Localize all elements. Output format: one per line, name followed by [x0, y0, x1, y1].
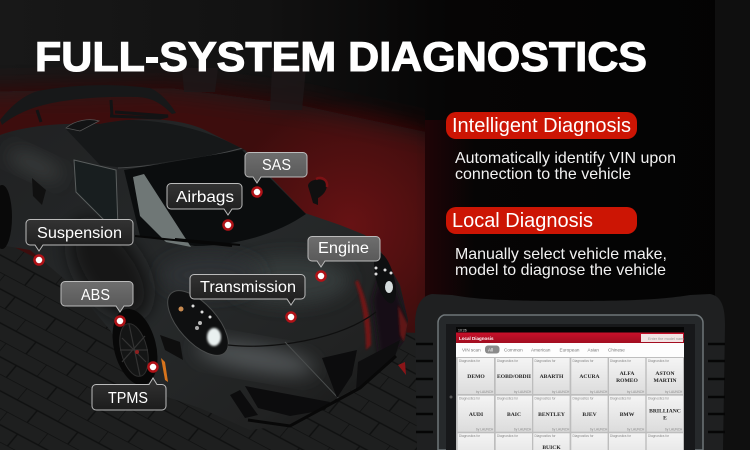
vehicle make grid: Diagnostics for: [459, 396, 481, 400]
vehicle make grid: Diagnostics for: [497, 434, 519, 438]
tablet rubber case: [415, 294, 725, 450]
windshield: [124, 150, 306, 246]
vehicle make grid: by LAUNCH: [590, 428, 608, 432]
tablet bezel: [438, 315, 703, 450]
vehicle make grid: Diagnostics for: [459, 359, 481, 363]
vehicle make grid: BAIC: [507, 412, 521, 418]
tablet screen: Common: [504, 348, 523, 352]
car: [0, 85, 408, 430]
vehicle make grid: Diagnostics for: [572, 396, 595, 400]
text: intelligent diagnosis description: connection to the vehicle: [455, 166, 631, 183]
rear spoiler: [0, 85, 176, 125]
title: FULL-SYSTEM DIAGNOSTICS: [35, 33, 647, 80]
vehicle make grid: AUDI: [469, 412, 483, 418]
heading pill: Local Diagnosis: Local Diagnosis: [452, 210, 593, 232]
vehicle make grid: [458, 358, 683, 450]
tablet device: [415, 294, 725, 450]
right headlight: [370, 251, 400, 305]
tablet screen: [456, 327, 685, 450]
vehicle make grid: by LAUNCH: [627, 390, 645, 394]
label: Airbags: [167, 184, 242, 230]
text: local diagnosis description: Manually select vehicle make,: [455, 246, 667, 263]
vehicle make grid: ABARTH: [540, 374, 564, 380]
vehicle make grid: by LAUNCH: [665, 390, 683, 394]
vehicle make grid: MARTIN: [653, 378, 677, 384]
vehicle make grid: BMW: [620, 412, 635, 418]
label: TPMS: [92, 362, 166, 410]
label: ABS: ABS: [81, 287, 110, 304]
side indicator: [161, 358, 168, 382]
vehicle make grid: ALFA: [620, 371, 634, 377]
vehicle make grid: Diagnostics for: [459, 434, 481, 438]
vehicle make grid: Diagnostics for: [648, 396, 670, 400]
tablet screen: All: [488, 348, 493, 352]
vehicle make grid: Diagnostics for: [572, 359, 595, 363]
roof scoop: [66, 120, 99, 131]
car body: [0, 119, 408, 430]
vehicle make grid: by LAUNCH: [514, 428, 532, 432]
vehicle make grid: BRILLIANC: [649, 408, 681, 414]
label: Engine: [308, 236, 380, 280]
label: ABS: [61, 282, 133, 326]
vehicle make grid: Diagnostics for: [572, 434, 595, 438]
vehicle make grid: BENTLEY: [538, 412, 565, 418]
vehicle make grid: Diagnostics for: [648, 359, 670, 363]
windshield reflection: [133, 174, 191, 247]
label: Engine: Engine: [318, 240, 369, 257]
vehicle make grid: by LAUNCH: [590, 390, 608, 394]
left headlight: [157, 281, 239, 365]
label: Suspension: [26, 220, 133, 264]
screen tabs: [456, 343, 684, 357]
main grille: [322, 350, 357, 398]
heading pill: Local Diagnosis: [446, 207, 637, 234]
vehicle make grid: Diagnostics for: [497, 396, 519, 400]
vehicle make grid: E: [663, 416, 667, 422]
vehicle make grid: Diagnostics for: [534, 396, 557, 400]
tablet screen: Local Diagnosis: [459, 336, 494, 341]
vehicle make grid: BJEV: [582, 412, 597, 418]
label: SAS: [245, 152, 307, 196]
vehicle make grid: by LAUNCH: [552, 390, 570, 394]
tablet screen: VIN scan: [462, 348, 481, 352]
vehicle make grid: by LAUNCH: [514, 390, 532, 394]
vehicle make grid: ROMEO: [616, 378, 639, 384]
vehicle make grid: by LAUNCH: [627, 428, 645, 432]
label: Transmission: [190, 274, 305, 322]
front splitter: [248, 356, 396, 426]
heading pill: Intelligent Diagnosis: Intelligent Diagnosis: [452, 115, 631, 137]
tablet screen: Chinese: [608, 348, 625, 352]
side window: [74, 160, 118, 228]
vehicle make grid: ACURA: [579, 374, 600, 380]
red hood reflection: [355, 280, 371, 350]
tablet screen: American: [531, 348, 551, 352]
vehicle make grid: EOBD/OBDII: [497, 374, 531, 380]
roof shade: [65, 120, 245, 168]
side vent: [32, 178, 46, 205]
vehicle make grid: Diagnostics for: [534, 434, 557, 438]
vehicle make grid: Diagnostics for: [610, 359, 632, 363]
vehicle make grid: Diagnostics for: [610, 396, 632, 400]
label: SAS: SAS: [262, 157, 291, 174]
text: intelligent diagnosis description: Automatically identify VIN upon: [455, 150, 676, 167]
label: TPMS: TPMS: [108, 390, 148, 407]
rear wheel: [0, 185, 12, 249]
tablet screen: Asian: [588, 348, 599, 352]
vehicle make grid: by LAUNCH: [476, 390, 494, 394]
side air intake: [160, 335, 183, 360]
vehicle make grid: by LAUNCH: [476, 428, 494, 432]
tablet screen: European: [560, 348, 580, 352]
hood seam: [228, 312, 376, 346]
body highlights: [194, 335, 316, 381]
side mirror: [308, 179, 327, 205]
case side grips: [416, 344, 725, 432]
wipers: [135, 236, 240, 246]
brick ground: [0, 240, 425, 450]
tablet screen: 10:26: [458, 328, 467, 332]
vehicle make grid: by LAUNCH: [665, 428, 683, 432]
vehicle make grid: by LAUNCH: [552, 428, 570, 432]
label: Airbags: Airbags: [176, 189, 234, 206]
front wheel: [105, 304, 165, 390]
vehicle make grid: Diagnostics for: [648, 434, 670, 438]
tablet screen: Enter the model name: [648, 337, 685, 341]
vehicle make grid: ASTON: [655, 371, 675, 377]
screen header bar: [456, 332, 684, 343]
vehicle make grid: DEMO: [467, 374, 485, 380]
rear dark zone: [64, 216, 156, 320]
lower grille: [245, 386, 330, 416]
vehicle make grid: Diagnostics for: [497, 359, 519, 363]
label: Suspension: Suspension: [37, 225, 122, 242]
vehicle make grid: Diagnostics for: [610, 434, 632, 438]
label: Transmission: Transmission: [200, 279, 296, 296]
text: local diagnosis description: model to diagnose the vehicle: [455, 262, 666, 279]
vehicle make grid: Diagnostics for: [534, 359, 557, 363]
